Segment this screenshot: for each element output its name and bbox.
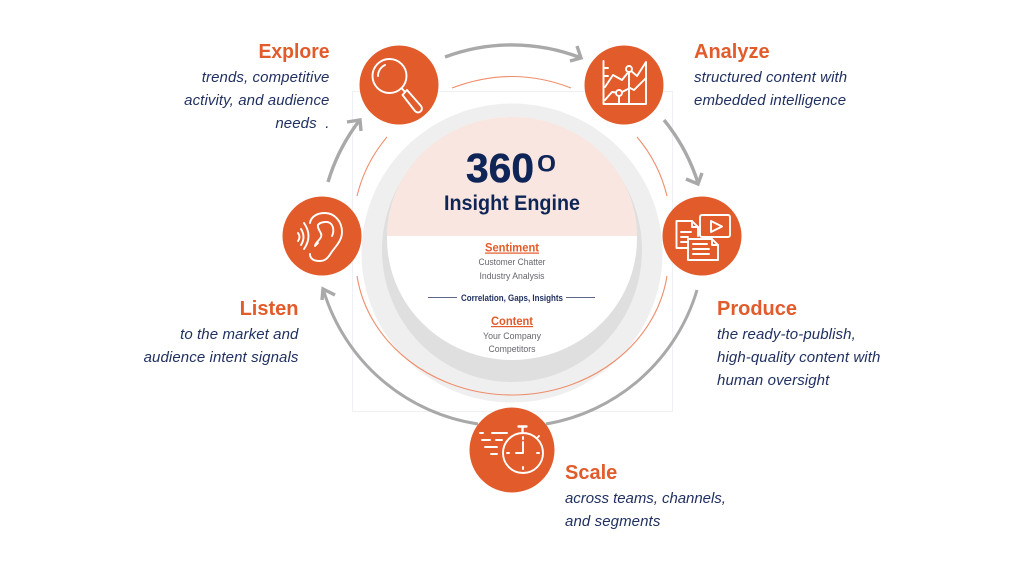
label: produce: human oversight <box>717 372 830 389</box>
label: explore: activity, and audience <box>184 92 330 109</box>
sentiment block: Customer Chatter <box>478 257 546 267</box>
icon: analyze chart <box>584 46 664 124</box>
label: explore: Explore <box>258 41 330 63</box>
central hub <box>362 104 662 402</box>
label: explore: trends, competitive <box>202 69 330 86</box>
label: produce: Produce <box>717 298 797 320</box>
thin orange ring arcs <box>357 76 667 395</box>
label: listen: audience intent signals <box>144 349 299 366</box>
content block: Content <box>491 314 533 328</box>
label: listen: Listen <box>240 298 298 320</box>
label: produce: the ready-to-publish, <box>717 326 856 343</box>
label: scale: and segments <box>565 513 661 530</box>
icon: explore magnifier <box>360 46 438 124</box>
hub lower white disc <box>387 117 637 360</box>
arrow: analyze to produce <box>664 120 702 184</box>
hub upper pink section <box>387 117 637 236</box>
label: listen: to the market and <box>180 326 299 343</box>
arrow: produce to scale <box>546 290 697 424</box>
label: scale: Scale <box>565 462 617 484</box>
hub title 360: o <box>537 145 556 178</box>
arrow: listen to explore <box>328 120 361 182</box>
content block <box>483 314 542 354</box>
arrow: scale to listen <box>322 289 478 424</box>
label: scale: across teams, channels, <box>565 490 726 507</box>
label: analyze: embedded intelligence <box>694 92 846 109</box>
hub title 360: 360 <box>466 145 534 191</box>
label: explore <box>184 41 330 132</box>
icon: scale stopwatch <box>470 408 554 492</box>
label: produce <box>717 298 880 389</box>
content block: Competitors <box>488 344 536 354</box>
label: produce: high-quality content with <box>717 349 880 366</box>
label: listen <box>144 298 299 366</box>
correlation divider: Correlation, Gaps, Insights <box>461 293 563 303</box>
label: scale <box>565 462 726 530</box>
sentiment block <box>478 240 546 281</box>
hub subtitle: Insight Engine <box>444 192 580 215</box>
sentiment block: Industry Analysis <box>480 271 545 281</box>
label: explore: needs . <box>275 115 330 132</box>
arrow: explore to analyze <box>445 45 581 61</box>
label: analyze <box>694 41 847 109</box>
icon: produce documents and video <box>662 196 742 276</box>
icon: listen ear <box>282 196 362 276</box>
sentiment block: Sentiment <box>485 240 539 254</box>
label: analyze: Analyze <box>694 41 770 63</box>
label: analyze: structured content with <box>694 69 847 86</box>
content block: Your Company <box>483 331 542 341</box>
